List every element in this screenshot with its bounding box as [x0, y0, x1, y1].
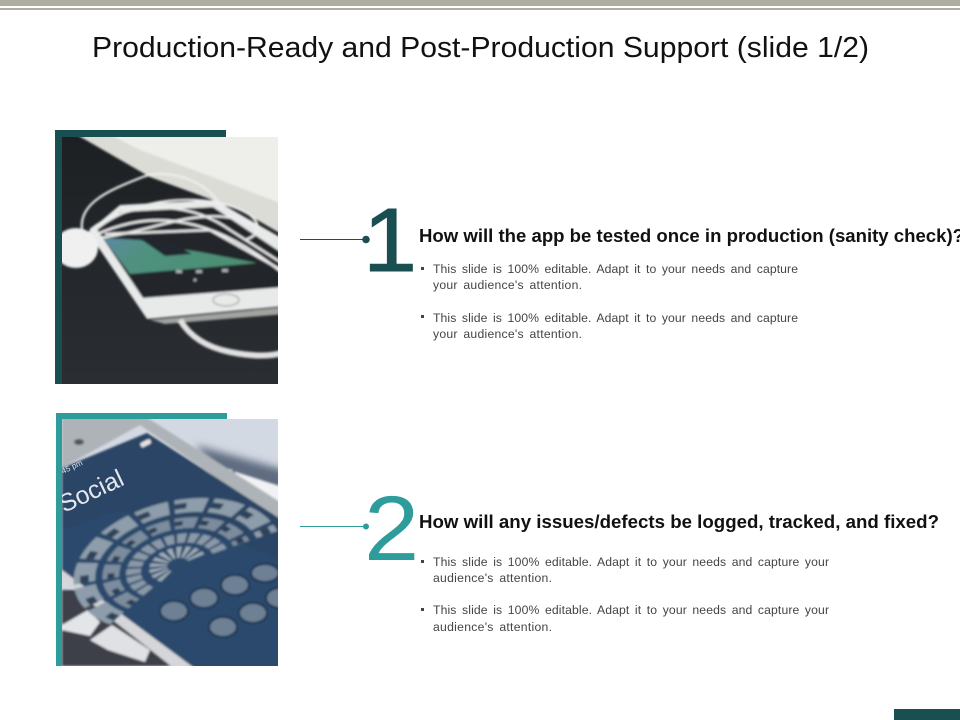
title: Production-Ready and Post-Production Support (slide 1/2) [92, 32, 869, 64]
frame: teal corner [56, 413, 227, 666]
bullets 2: This slide is 100% editable. Adapt it to your needs and capture your [433, 555, 829, 569]
bullets 2: audience's attention. [433, 620, 552, 634]
connector line 1 [300, 236, 370, 243]
bullets 2: This slide is 100% editable. Adapt it to your needs and capture your [433, 603, 829, 617]
heading 2: How will any issues/defects be logged, tracked, and fixed? [419, 511, 939, 532]
bullets 1: This slide is 100% editable. Adapt it to your needs and capture [433, 311, 798, 325]
bullets 2 [421, 555, 829, 634]
connector line 2 [300, 524, 369, 530]
label: time: 45 pm [60, 458, 84, 476]
mosaic of faces [72, 487, 278, 624]
heading 1: How will the app be tested once in production (sanity check)? [419, 225, 960, 246]
footer tab [894, 709, 960, 720]
bullets 2: audience's attention. [433, 571, 552, 585]
photo: phone with earphones [54, 132, 285, 384]
number 2: 2 [364, 477, 419, 580]
panel: item 1 photo with frame [54, 130, 285, 384]
bullets 1 [421, 262, 798, 341]
panel: item 2 photo with frame [55, 410, 294, 670]
frame: dark teal corner [55, 130, 226, 384]
top header bars [0, 0, 960, 10]
number 1: 1 [363, 189, 417, 290]
photo: social phone [62, 419, 278, 666]
bullets 1: This slide is 100% editable. Adapt it to your needs and capture [433, 262, 798, 276]
label: Social: Social [55, 464, 128, 518]
bullets 1: your audience's attention. [433, 327, 582, 341]
bullets 1: your audience's attention. [433, 278, 582, 292]
